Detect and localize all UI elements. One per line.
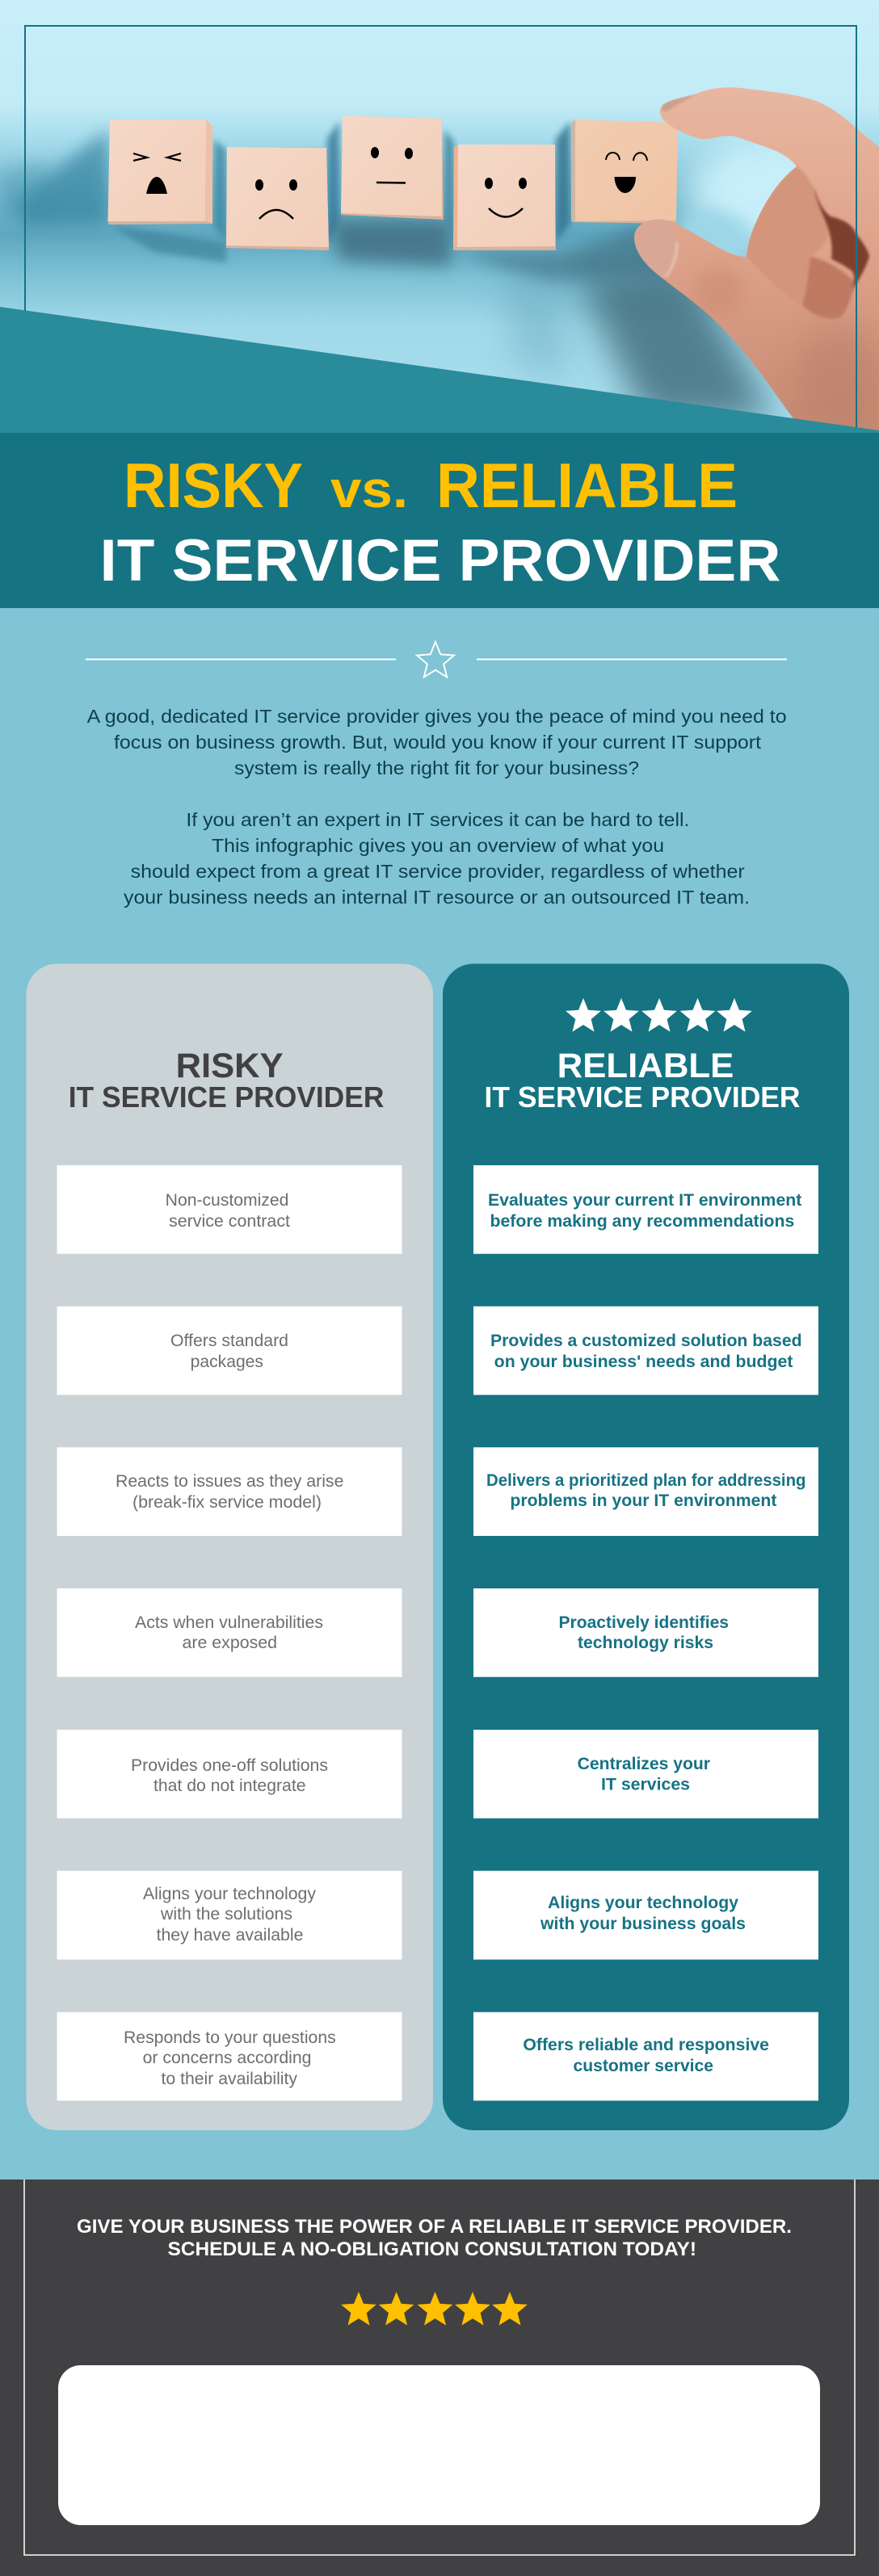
reliable item 7 [473, 2012, 818, 2100]
footer text: GIVE YOUR BUSINESS THE POWER OF A RELIABLE IT SERVICE PROVIDER. [77, 2216, 792, 2238]
reliable item 5: Centralizes your [578, 1755, 710, 1773]
risky item 7: to their availability [162, 2070, 297, 2088]
reliable item 3: Delivers a prioritized plan for addressing [486, 1471, 806, 1490]
risky item 7: or concerns according [143, 2049, 312, 2067]
intro text: A good, dedicated IT service provider gives you the peace of mind you need to [87, 706, 787, 727]
reliable item 1: before making any recommendations [490, 1212, 794, 1231]
hero inset frame [25, 26, 856, 510]
white contact box [58, 2365, 820, 2525]
reliable item 2: Provides a customized solution based [490, 1332, 802, 1350]
risky item 3: (break-fix service model) [132, 1493, 322, 1512]
reliable heading: RELIABLE [557, 1047, 734, 1085]
risky item 3 [57, 1447, 402, 1536]
icon: five gold stars [341, 2292, 528, 2326]
risky item 6 [57, 1871, 402, 1960]
risky heading: RISKY [176, 1047, 284, 1085]
risky item 1 [57, 1165, 402, 1254]
teal diagonal wedge [0, 307, 879, 434]
ring finger [802, 257, 855, 319]
reliable item 4: Proactively identifies [559, 1613, 729, 1632]
title line 1: RISKY [124, 450, 303, 521]
risky heading [69, 1047, 384, 1114]
reliable item 2 [473, 1307, 818, 1395]
risky item 7: Responds to your questions [124, 2028, 336, 2047]
risky item 6: they have available [157, 1926, 303, 1945]
index finger nail [662, 94, 696, 112]
intro text: focus on business growth. But, would you know if your current IT support [114, 732, 761, 753]
reliable item 3: problems in your IT environment [510, 1491, 776, 1510]
risky item 3: Reacts to issues as they arise [116, 1472, 343, 1491]
intro text: should expect from a great IT service provider, regardless of whether [131, 861, 745, 882]
reliable heading: IT SERVICE PROVIDER [485, 1080, 800, 1114]
hand holding the block [634, 87, 879, 436]
palm gap shadow [814, 188, 869, 289]
risky item 4: are exposed [183, 1634, 277, 1652]
title line 1 [124, 450, 738, 521]
risky item 2: packages [191, 1353, 263, 1371]
reliable item 4 [473, 1588, 818, 1677]
risky item 2 [57, 1307, 402, 1395]
photo backdrop [0, 0, 879, 436]
reliable item 4: technology risks [578, 1634, 713, 1652]
block 5: laughing face [571, 120, 678, 224]
risky item 1: service contract [169, 1212, 290, 1231]
hand shading [634, 94, 879, 436]
risky item 4 [57, 1588, 402, 1677]
reliable item 5 [473, 1730, 818, 1819]
reliable item 2: on your business' needs and budget [494, 1353, 793, 1371]
footer call to action [0, 2180, 879, 2576]
reliable heading [485, 1047, 800, 1114]
panel: reliable provider [443, 964, 849, 2130]
risky item 5: that do not integrate [154, 1777, 305, 1795]
reliable item 6: with your business goals [540, 1915, 746, 1933]
intro text: This infographic gives you an overview of what you [212, 835, 664, 856]
reliable item 1: Evaluates your current IT environment [488, 1191, 801, 1210]
reliable item 6 [473, 1871, 818, 1960]
risky heading: IT SERVICE PROVIDER [69, 1080, 384, 1114]
risky item 1: Non-customized [166, 1191, 288, 1210]
hero photo: wooden face blocks and hand [0, 0, 879, 436]
risky item 2: Offers standard [170, 1332, 288, 1350]
risky item 5: Provides one-off solutions [131, 1756, 328, 1775]
middle finger [747, 166, 829, 305]
risky item 5 [57, 1730, 402, 1819]
intro text: your business needs an internal IT resource or an outsourced IT team. [124, 887, 750, 908]
risky item 4: Acts when vulnerabilities [135, 1613, 323, 1632]
title line 2: IT SERVICE PROVIDER [100, 528, 780, 594]
title banner [0, 433, 879, 608]
intro text [87, 706, 787, 908]
footer text: SCHEDULE A NO-OBLIGATION CONSULTATION TODAY! [168, 2238, 696, 2260]
reliable item 5: IT services [601, 1775, 690, 1794]
reliable item 7: Offers reliable and responsive [523, 2036, 769, 2054]
intro text: If you aren’t an expert in IT services it can be hard to tell. [186, 809, 689, 830]
risky item 7 [57, 2012, 402, 2100]
reliable item 6: Aligns your technology [548, 1894, 738, 1912]
title line 1: RELIABLE [436, 450, 738, 521]
risky item 6: with the solutions [160, 1905, 292, 1924]
panel: risky provider [26, 964, 433, 2130]
block 2: sad face [226, 147, 329, 250]
reliable item 7: customer service [574, 2057, 713, 2075]
icon: five white stars [566, 998, 752, 1032]
block 4: smiling face [453, 145, 556, 250]
block 3: neutral face [341, 115, 444, 220]
footer text [77, 2216, 792, 2260]
star divider [86, 642, 787, 678]
block 1: crying face [107, 120, 212, 224]
footer frame [24, 2180, 855, 2555]
thumb nail [634, 223, 675, 279]
intro text: system is really the right fit for your business? [234, 757, 639, 778]
reliable item 3 [473, 1447, 818, 1536]
risky item 6: Aligns your technology [143, 1885, 317, 1903]
title line 1: vs. [330, 460, 408, 518]
reliable item 1 [473, 1165, 818, 1254]
